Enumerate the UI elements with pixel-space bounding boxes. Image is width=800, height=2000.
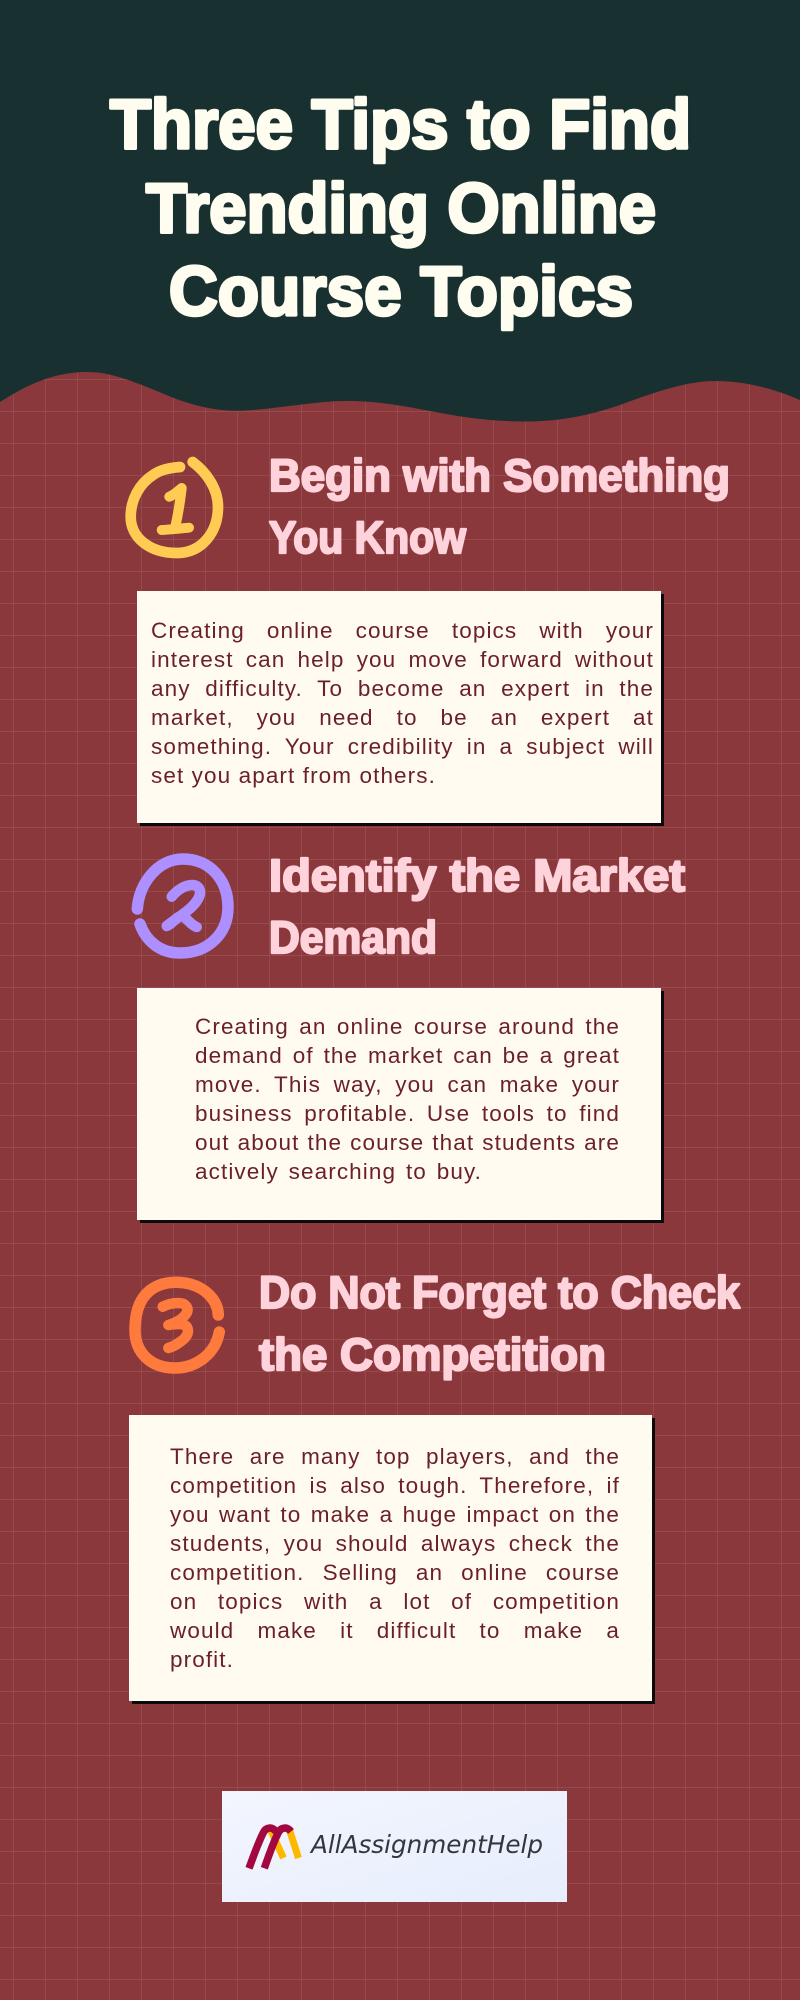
text block: step 1: any difficulty. To become an expert in the [151, 676, 654, 701]
title [110, 85, 691, 330]
text block: step 3: profit. [170, 1647, 234, 1672]
text block: step 2: Creating an online course around the [195, 1014, 620, 1039]
text block: step 3 [170, 1444, 620, 1672]
heading: step 2: Demand [269, 912, 437, 963]
heading: step 2 [269, 850, 685, 963]
text block: step 2: actively searching to buy. [195, 1159, 482, 1184]
icon: number 1 in yellow circle [131, 462, 218, 553]
text block: step 2: move. This way, you can make your [195, 1072, 620, 1097]
panel: step 3 text card [129, 1415, 652, 1701]
heading: step 3: Do Not Forget to Check [259, 1267, 741, 1318]
text block: step 1: interest can help you move forward without [151, 647, 654, 672]
panel: step 2 text card [137, 988, 661, 1220]
title: Three Tips to Find [110, 85, 691, 163]
text block: step 2: out about the course that students are [195, 1130, 620, 1155]
heading: step 1 [269, 450, 730, 563]
text block: step 3: competition is also tough. Therefore, if [170, 1473, 620, 1498]
title: Trending Online [146, 169, 656, 247]
text block: step 1: set you apart from others. [151, 763, 436, 788]
logo box [222, 1791, 567, 1902]
heading: step 1: You Know [269, 512, 467, 563]
icon: number 2 in purple circle [137, 859, 228, 953]
text block: step 2 [195, 1014, 620, 1184]
heading: step 2: Identify the Market [269, 850, 685, 901]
text block: step 1: market, you need to be an expert at [151, 705, 654, 730]
text block: step 2: business profitable. Use tools to find [195, 1101, 620, 1126]
heading: step 3 [259, 1267, 741, 1380]
icon: logo mark [249, 1828, 298, 1868]
text block: step 3: students, you should always check the [170, 1531, 620, 1556]
title: Course Topics [169, 252, 633, 330]
text block: step 3: you want to make a huge impact on the [170, 1502, 620, 1527]
heading: step 1: Begin with Something [269, 450, 730, 501]
text block: step 1 [151, 618, 654, 788]
heading: step 3: the Competition [259, 1329, 606, 1380]
panel: step 1 text card [137, 591, 661, 823]
text block: step 3: competition. Selling an online course [170, 1560, 620, 1585]
logo wordmark: AllAssignmentHelp [309, 1830, 543, 1859]
icon: number 3 in orange circle [135, 1282, 219, 1368]
text block: step 2: demand of the market can be a great [195, 1043, 620, 1068]
dark wavy header band [0, 0, 800, 422]
text block: step 3: would make it difficult to make a [170, 1618, 620, 1643]
text block: step 1: something. Your credibility in a subject will [151, 734, 654, 759]
text block: step 1: Creating online course topics with your [151, 618, 654, 643]
text block: step 3: on topics with a lot of competition [170, 1589, 620, 1614]
text block: step 3: There are many top players, and the [170, 1444, 620, 1469]
